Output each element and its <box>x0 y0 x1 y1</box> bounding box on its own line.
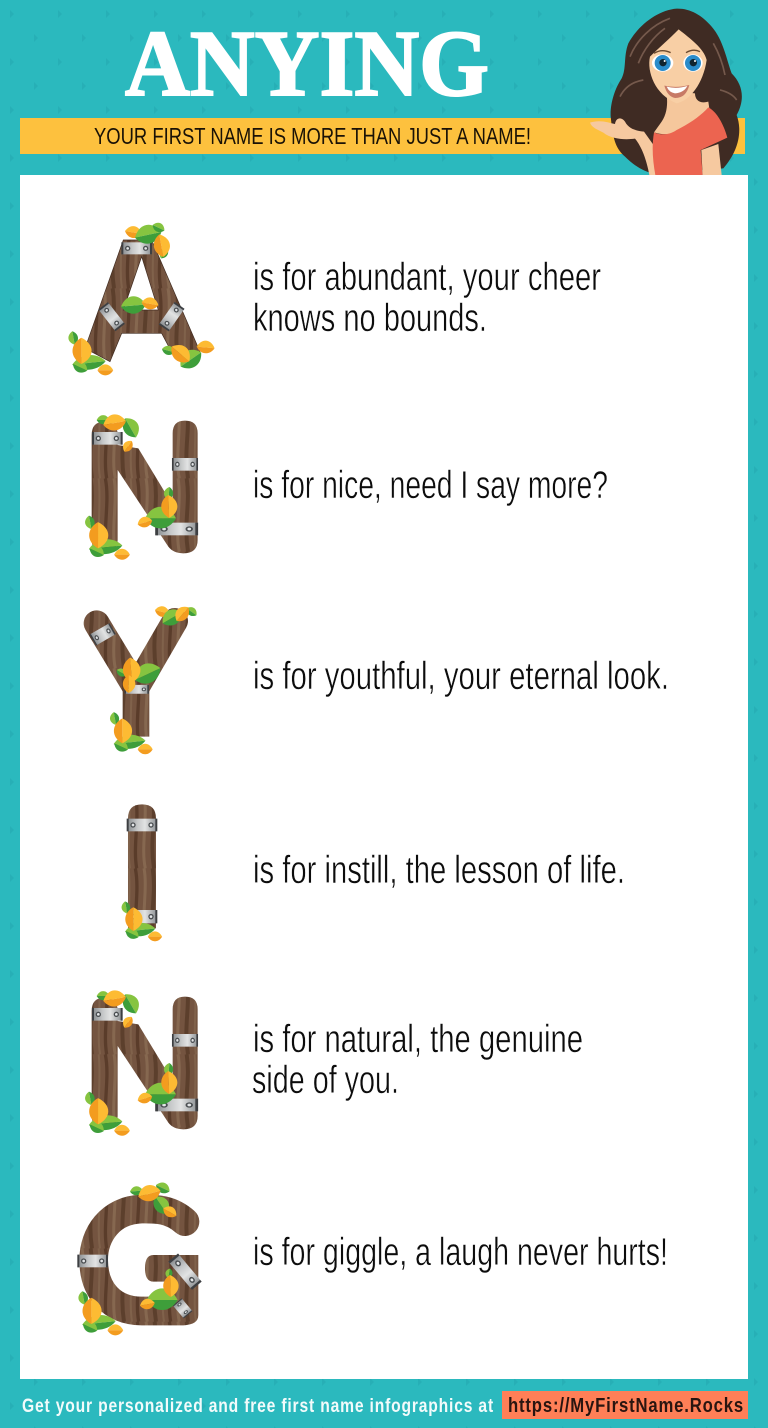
text: A meaning: knows no bounds. <box>253 297 487 340</box>
face <box>649 29 707 103</box>
letter I <box>121 804 162 941</box>
text: I meaning: is for instill, the lesson of life. <box>253 849 625 892</box>
arm and hand <box>590 118 660 175</box>
text: N meaning: is for nice, need I say more? <box>253 464 608 507</box>
right arm <box>701 144 722 175</box>
text: A meaning <box>253 256 601 340</box>
hair highlights <box>620 18 737 100</box>
smile <box>664 85 689 98</box>
neck and chest <box>654 90 709 134</box>
letter Y <box>90 603 199 754</box>
title: ANYING <box>125 12 489 116</box>
white content panel <box>20 175 748 1379</box>
subtitle banner: YOUR FIRST NAME IS MORE THAN JUST A NAME! <box>94 123 531 149</box>
letter N second <box>84 989 198 1136</box>
subtitle banner <box>20 118 745 154</box>
letter N <box>84 413 198 560</box>
hair <box>611 9 742 174</box>
letter A <box>67 221 215 375</box>
text: second N meaning: side of you. <box>252 1059 399 1102</box>
text: second N meaning <box>252 1018 583 1102</box>
text: A meaning: is for abundant, your cheer <box>253 256 601 299</box>
coral top <box>653 107 727 175</box>
eyes <box>652 50 703 72</box>
text: second N meaning: is for natural, the genuine <box>253 1018 583 1061</box>
character illustration <box>590 9 742 175</box>
letter G <box>77 1180 202 1335</box>
footer text: Get your personalized and free first name infographics at <box>22 1396 494 1417</box>
